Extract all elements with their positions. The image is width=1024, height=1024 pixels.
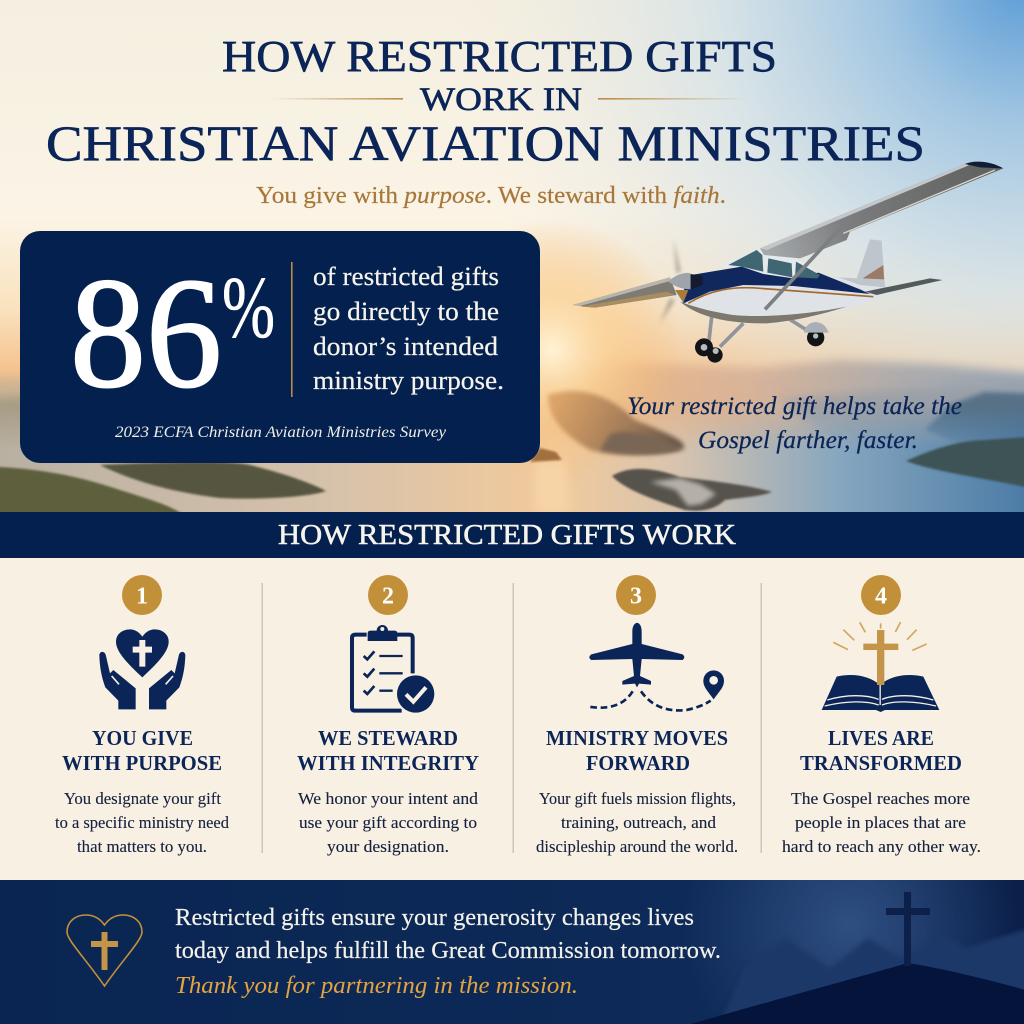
description 2: your designation. (327, 837, 449, 856)
statistic description: donor’s intended (313, 332, 498, 361)
description 3: discipleship around the world. (536, 837, 738, 856)
description 4 (782, 789, 981, 856)
heading 4 (800, 726, 962, 775)
wing strut (765, 225, 843, 309)
description 4: people in places that are (795, 813, 966, 832)
heading 1: YOU GIVE (92, 726, 193, 750)
heading 2: WITH INTEGRITY (297, 751, 479, 775)
propeller blur (660, 238, 681, 323)
plane caption: Your restricted gift helps take the (627, 393, 962, 420)
heading 3: MINISTRY MOVES (546, 726, 728, 750)
description 2: We honor your intent and (298, 789, 479, 808)
tail fin (838, 239, 885, 287)
description 2: use your gift according to (299, 813, 477, 832)
description 3: training, outreach, and (561, 813, 717, 832)
title: HOW RESTRICTED GIFTS (222, 32, 777, 81)
gold divider (291, 262, 293, 397)
plane caption (627, 393, 962, 454)
description 1: to a specific ministry need (55, 813, 230, 832)
step 3 (536, 575, 738, 856)
title: CHRISTIAN AVIATION MINISTRIES (46, 115, 925, 171)
number badge 4: 4 (875, 584, 887, 610)
heading 3: FORWARD (586, 751, 690, 775)
icon: hands holding heart with cross (99, 629, 185, 709)
island: left foreground (100, 462, 326, 499)
description 4: hard to reach any other way. (782, 837, 981, 856)
island: centre left headland (548, 391, 684, 454)
statistic description: of restricted gifts (313, 262, 499, 291)
closing message: Restricted gifts ensure your generosity changes lives (175, 904, 694, 931)
footer mountains and cross silhouette (670, 892, 1024, 1024)
closing message (175, 904, 721, 999)
heading 4: TRANSFORMED (800, 751, 962, 775)
section banner: HOW RESTRICTED GIFTS WORK (278, 520, 736, 551)
windows (728, 250, 820, 278)
description 1 (55, 789, 230, 856)
icon: open bible with radiant cross (822, 622, 939, 712)
statistic description: go directly to the (313, 297, 499, 326)
number badge 3: 3 (630, 584, 642, 610)
stabilizer (865, 278, 943, 295)
description 3: Your gift fuels mission flights, (539, 789, 736, 808)
spinner (668, 273, 691, 289)
step 4 (782, 575, 981, 856)
heading 1 (62, 726, 222, 775)
cabin (717, 249, 823, 277)
statistic description: ministry purpose. (313, 366, 504, 395)
closing message: Thank you for partnering in the mission. (175, 972, 578, 999)
panel: four steps (0, 558, 1024, 880)
subtitle: You give with purpose. We steward with faith. (256, 183, 726, 209)
big number: 86 (70, 246, 222, 421)
description 4: The Gospel reaches more (791, 789, 970, 808)
description 1: You designate your gift (64, 789, 221, 808)
number badge 1 (122, 575, 162, 615)
source: 2023 ECFA Christian Aviation Ministries Survey (115, 424, 447, 441)
plane caption: Gospel farther, faster. (698, 427, 918, 454)
ornament: gold rule right (598, 98, 750, 100)
title (46, 32, 925, 171)
footer banner (0, 880, 1024, 1024)
landing gear (695, 313, 829, 363)
near wing (573, 277, 677, 308)
closing message: today and helps fulfill the Great Commission tomorrow. (175, 937, 721, 964)
background: sky and sunset lake landscape (0, 0, 1024, 514)
icon: clipboard checklist (352, 625, 436, 715)
panel: 86 percent statistic (20, 231, 540, 463)
number badge 2: 2 (382, 584, 394, 610)
description 3 (536, 789, 738, 856)
heading 3 (546, 726, 728, 775)
coast: right (906, 436, 1024, 490)
statistic description (313, 262, 504, 395)
percent sign: % (222, 260, 275, 357)
description 2 (298, 789, 479, 856)
heading 2 (297, 726, 479, 775)
step 1 (55, 575, 230, 856)
number badge 3 (616, 575, 656, 615)
navy livery (683, 267, 870, 303)
fuselage (675, 267, 885, 323)
heading 1: WITH PURPOSE (62, 751, 222, 775)
number badge 1: 1 (136, 584, 148, 610)
main wing (760, 163, 1003, 258)
step 2 (297, 575, 479, 856)
icon: heart outline with cross (67, 915, 142, 986)
airplane (573, 162, 1003, 363)
heading 4: LIVES ARE (828, 726, 934, 750)
description 1: that matters to you. (77, 837, 207, 856)
title: WORK IN (420, 82, 582, 118)
number badge 4 (861, 575, 901, 615)
section banner (0, 512, 1024, 558)
heading 2: WE STEWARD (318, 726, 458, 750)
icon: plane with dashed route and pin (588, 623, 724, 710)
ornament: gold rule left (270, 98, 403, 100)
island: centre foreground (612, 469, 772, 511)
number badge 2 (368, 575, 408, 615)
